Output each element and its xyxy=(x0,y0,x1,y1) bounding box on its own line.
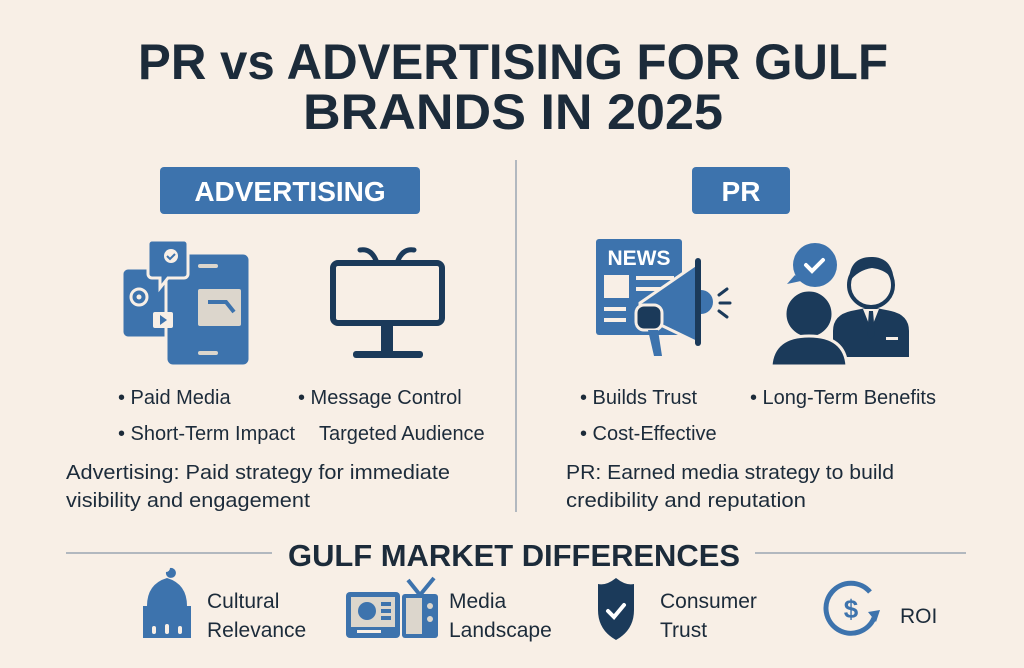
icon: social phones xyxy=(122,240,250,366)
text: advertising description: Advertising: Paid strategy for immediate xyxy=(66,462,450,484)
icon: media xyxy=(346,578,438,638)
item: consumer trust xyxy=(598,578,757,642)
heading: gulf market differences: GULF MARKET DIFFERENCES xyxy=(288,538,740,573)
icon: news megaphone xyxy=(596,239,730,356)
bullets: advertising: • Message Control xyxy=(298,387,462,409)
badge: pr xyxy=(692,167,790,214)
bullets: pr: • Cost-Effective xyxy=(580,423,717,445)
bullets: pr: • Builds Trust xyxy=(580,387,697,409)
bullets: advertising: Targeted Audience xyxy=(319,423,485,445)
bullets: pr xyxy=(580,387,936,445)
icon: mosque xyxy=(143,568,191,638)
badge: advertising xyxy=(160,167,420,214)
text: pr description: credibility and reputation xyxy=(566,490,806,512)
item: roi xyxy=(826,583,937,633)
icon: news megaphone: NEWS xyxy=(608,247,670,270)
icon: shield xyxy=(598,578,634,640)
title: PR vs ADVERTISING FOR GULF xyxy=(138,34,888,90)
icon: roi cycle: $ xyxy=(844,594,859,624)
item: cultural relevance xyxy=(143,568,306,642)
bullets: advertising xyxy=(118,387,485,445)
item: consumer trust: Trust xyxy=(660,619,707,642)
title xyxy=(138,34,888,140)
text: advertising description: visibility and engagement xyxy=(66,490,310,512)
item: media landscape xyxy=(346,578,552,642)
icon: tv billboard xyxy=(333,250,442,358)
panel: pr xyxy=(566,167,936,512)
item: consumer trust: Consumer xyxy=(660,590,757,613)
bullets: advertising: • Paid Media xyxy=(118,387,231,409)
panel: advertising xyxy=(66,167,485,512)
icon: people trust xyxy=(771,243,909,366)
bullets: advertising: • Short-Term Impact xyxy=(118,423,295,445)
bullets: pr: • Long-Term Benefits xyxy=(750,387,936,409)
item: cultural relevance: Cultural xyxy=(207,590,279,613)
badge: advertising: ADVERTISING xyxy=(194,176,386,207)
item: roi: ROI xyxy=(900,605,937,628)
item: media landscape: Landscape xyxy=(449,619,552,642)
text: advertising description xyxy=(66,462,450,512)
item: media landscape: Media xyxy=(449,590,507,613)
item: cultural relevance: Relevance xyxy=(207,619,306,642)
text: pr description xyxy=(566,462,894,512)
badge: pr: PR xyxy=(722,176,760,207)
title: BRANDS IN 2025 xyxy=(303,84,723,140)
text: pr description: PR: Earned media strategy to build xyxy=(566,462,894,484)
